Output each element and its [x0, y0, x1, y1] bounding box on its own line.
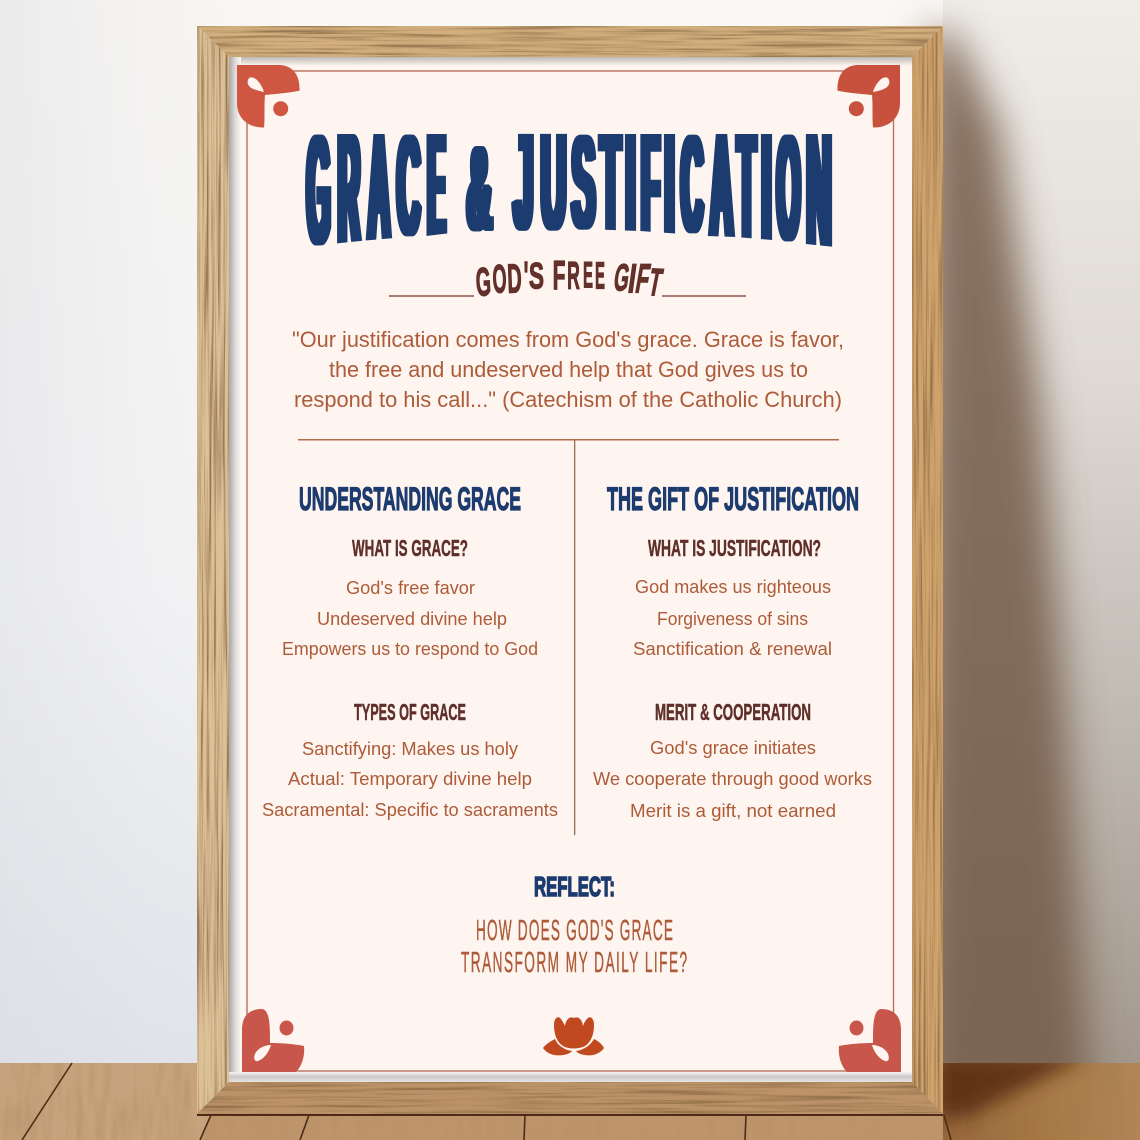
subtitle with side rules: O — [492, 256, 507, 302]
main title: J — [514, 107, 533, 259]
main title: C — [397, 106, 420, 264]
subtitle with side rules: R — [567, 255, 580, 298]
list: types of grace: Sacramental: Specific to sacraments — [262, 800, 558, 820]
main title: A — [368, 103, 390, 273]
list: merit and cooperation: We cooperate through good works — [593, 769, 872, 789]
list: merit and cooperation — [593, 738, 872, 821]
subheading: types of grace: TYPES OF GRACE — [354, 699, 466, 725]
list: types of grace — [262, 739, 558, 820]
wooden floor — [0, 1055, 1140, 1140]
subtitle with side rules: G — [475, 260, 492, 305]
list: merit and cooperation: God's grace initiates — [650, 738, 816, 758]
list: what is grace: Empowers us to respond to God — [282, 639, 538, 659]
subtitle with side rules: ' — [524, 253, 528, 299]
section dividers — [298, 439, 839, 835]
subtitle with side rules: G — [611, 258, 632, 299]
main title: E — [428, 105, 445, 268]
heading: the gift of justification: THE GIFT OF JUSTIFICATION — [607, 481, 859, 517]
corner ornament: bottom left — [242, 1009, 304, 1072]
list: what is grace: Undeserved divine help — [317, 609, 507, 629]
heading: understanding grace: UNDERSTANDING GRACE — [299, 481, 521, 517]
reflection question — [461, 913, 687, 978]
main title: & — [467, 122, 492, 255]
catechism quote: "Our justification comes from God's grace. Grace is favor, — [292, 327, 844, 352]
wooden picture frame — [197, 26, 943, 1116]
catechism quote — [292, 327, 844, 412]
reflect heading: REFLECT: — [534, 871, 615, 902]
main title: O — [777, 105, 800, 271]
catechism quote: the free and undeserved help that God gives us to — [329, 357, 808, 382]
subtitle with side rules: I — [626, 257, 639, 302]
main title: T — [600, 106, 621, 260]
subtitle with side rules: F — [633, 255, 653, 301]
main title: G — [307, 104, 330, 276]
icon: lotus — [543, 1017, 604, 1055]
subtitle with side rules — [389, 253, 746, 305]
list: what is justification: Forgiveness of sins — [657, 609, 808, 629]
main title: S — [572, 110, 595, 256]
reflection question: TRANSFORM MY DAILY LIFE? — [461, 945, 687, 978]
main title: C — [681, 107, 703, 260]
list: what is justification: God makes us righteous — [635, 577, 831, 597]
subtitle with side rules: F — [553, 253, 565, 298]
main title: F — [641, 105, 660, 262]
main title: T — [737, 103, 756, 270]
subtitle with side rules: T — [645, 261, 666, 304]
list: what is grace — [282, 578, 538, 659]
main title: R — [338, 101, 360, 276]
corner ornament: top left — [237, 65, 300, 128]
subtitle with side rules: E — [595, 256, 605, 298]
main title: I — [761, 104, 772, 273]
subheading: what is justification: WHAT IS JUSTIFICATION? — [648, 535, 821, 561]
subtitle with side rules: S — [529, 255, 544, 297]
subtitle with side rules: D — [506, 255, 523, 302]
reflection question: HOW DOES GOD'S GRACE — [476, 913, 673, 946]
list: what is justification — [633, 577, 832, 659]
list: what is justification: Sanctification & renewal — [633, 639, 832, 659]
poster mat and paper — [229, 57, 912, 1082]
subtitle with side rules: E — [583, 253, 593, 295]
corner ornament: top right — [837, 65, 900, 128]
main title: I — [625, 105, 636, 261]
list: merit and cooperation: Merit is a gift, not earned — [630, 801, 836, 821]
list: types of grace: Actual: Temporary divine help — [288, 769, 532, 789]
catechism quote: respond to his call..." (Catechism of the Catholic Church) — [294, 387, 842, 412]
main title: U — [541, 107, 566, 259]
panel: the gift of justification — [593, 481, 872, 821]
subheading: what is grace: WHAT IS GRACE? — [352, 535, 468, 561]
main title: N — [807, 99, 831, 281]
subheading: merit and cooperation: MERIT & COOPERATION — [655, 699, 811, 725]
main title: A — [710, 103, 733, 269]
corner ornament: bottom right — [839, 1009, 901, 1072]
list: types of grace: Sanctifying: Makes us holy — [302, 739, 518, 759]
panel: understanding grace — [262, 481, 558, 820]
main title — [305, 134, 832, 247]
list: what is grace: God's free favor — [346, 578, 475, 598]
main title: I — [664, 105, 675, 265]
